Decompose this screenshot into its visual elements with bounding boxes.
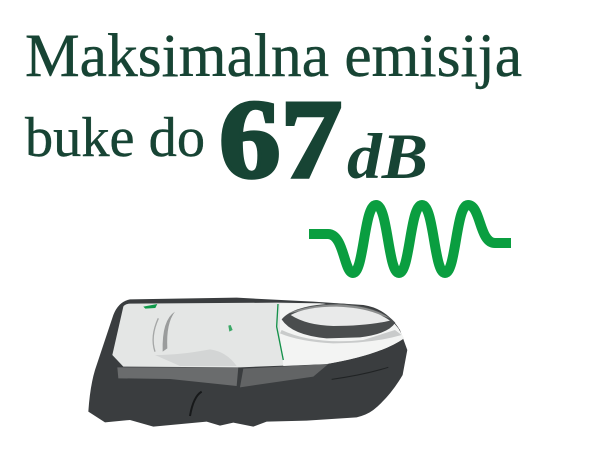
robot side highlight right [240, 364, 328, 387]
robot body [88, 298, 407, 427]
robot side highlight left [117, 367, 238, 386]
turret rim shading [288, 304, 390, 318]
icon: sound wave [309, 205, 511, 273]
green indicator [143, 304, 157, 309]
panel white zone [280, 303, 404, 366]
body side crease [332, 367, 388, 379]
robot top panel [112, 303, 404, 367]
panel shading [155, 349, 237, 366]
lidar turret top [291, 307, 390, 326]
slot outline [153, 318, 158, 352]
turret shadow [280, 330, 402, 343]
green center mark [228, 325, 233, 332]
number: 67: 67 [219, 78, 342, 202]
robot vacuum [88, 298, 407, 427]
title: line two: buke do [25, 107, 205, 169]
green seam line [277, 304, 283, 360]
lidar turret base [282, 303, 395, 338]
title: line one: Maksimalna emisija [25, 23, 522, 90]
bumper slot [163, 312, 175, 352]
body crease [190, 392, 202, 416]
unit: dB: dB [347, 121, 428, 193]
